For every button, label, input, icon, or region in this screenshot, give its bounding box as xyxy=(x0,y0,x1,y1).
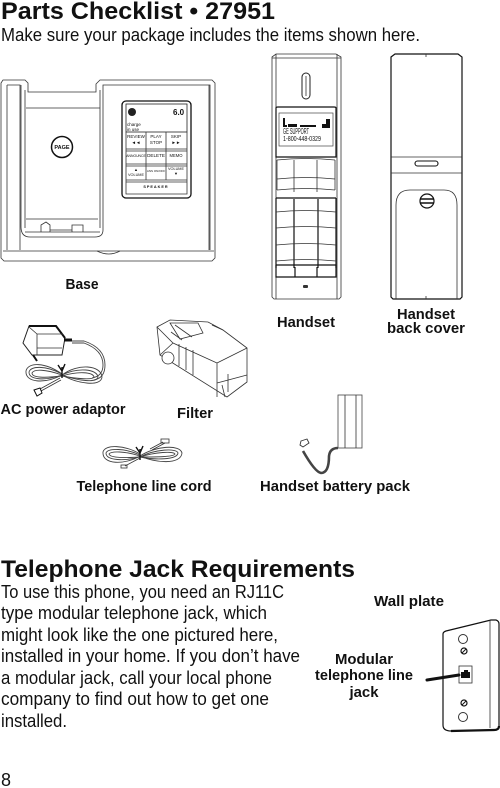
base keypad: ANNOUNCE xyxy=(126,154,146,158)
handset screen: 1-800-448-0329 xyxy=(283,136,321,143)
base keypad: ►► xyxy=(172,140,180,145)
base keypad: in use xyxy=(127,127,140,132)
handset back cover illustration xyxy=(391,54,462,299)
AC power adaptor illustration xyxy=(23,326,105,396)
page button xyxy=(52,136,72,158)
body text: installed in your home. If you don’t have xyxy=(1,646,300,666)
section heading: Telephone Jack Requirements xyxy=(1,556,355,583)
modular telephone line jack label xyxy=(315,652,413,701)
filter label: Filter xyxy=(177,406,213,422)
base keypad: SPEAKER xyxy=(143,185,169,189)
latch xyxy=(420,194,434,208)
base keypad: STOP xyxy=(150,140,162,145)
body text: To use this phone, you need an RJ11C xyxy=(1,582,284,602)
modular telephone line jack label: Modular xyxy=(335,652,393,668)
base keypad: charge xyxy=(127,122,141,127)
handset label: Handset xyxy=(277,315,335,331)
body text: installed. xyxy=(1,711,67,731)
handset back cover label: back cover xyxy=(387,321,465,337)
base keypad: VOLUME xyxy=(168,167,184,171)
body text: might look like the one pictured here, xyxy=(1,625,278,645)
page button: PAGE xyxy=(54,145,70,151)
handset screen: GE SUPPORT xyxy=(283,127,309,136)
filter illustration xyxy=(157,320,247,397)
body text: company to find out how to get one xyxy=(1,689,269,709)
body text: type modular telephone jack, which xyxy=(1,603,267,623)
handset screen xyxy=(276,107,336,157)
handset keys xyxy=(276,158,336,288)
wall plate label: Wall plate xyxy=(374,594,444,610)
handset back cover label: Handset xyxy=(397,307,455,323)
base keypad: 6.0 xyxy=(173,108,185,117)
base keypad: MEMO xyxy=(169,153,183,158)
jack xyxy=(459,666,472,683)
handset back cover label xyxy=(387,307,465,337)
telephone line cord illustration xyxy=(103,439,182,468)
base keypad: ◄◄ xyxy=(132,140,140,145)
handset battery pack label: Handset battery pack xyxy=(260,479,411,495)
telephone line cord label: Telephone line cord xyxy=(76,479,212,495)
base keypad: SKIP xyxy=(171,134,181,139)
base keypad: VOLUME xyxy=(128,173,144,177)
base keypad xyxy=(122,101,191,198)
base keypad: ▲ xyxy=(134,167,138,172)
modular telephone line jack label: telephone line xyxy=(315,668,413,684)
wall plate illustration xyxy=(427,620,499,731)
AC power adaptor label: AC power adaptor xyxy=(0,402,126,418)
base keypad: ▼ xyxy=(174,171,178,176)
base keypad: REVIEW xyxy=(127,134,146,139)
intro text: Make sure your package includes the items shown here. xyxy=(1,25,420,45)
base keypad: DELETE xyxy=(147,153,165,158)
pointer arrow xyxy=(427,675,459,680)
base keypad: ANS ON/OFF xyxy=(147,169,165,173)
body text: a modular jack, call your local phone xyxy=(1,668,272,688)
modular telephone line jack label: jack xyxy=(348,685,379,701)
handset illustration xyxy=(272,54,341,299)
base label: Base xyxy=(66,277,98,293)
handset battery pack illustration xyxy=(300,395,362,473)
base illustration xyxy=(1,80,215,261)
base keypad: PLAY xyxy=(150,134,162,139)
